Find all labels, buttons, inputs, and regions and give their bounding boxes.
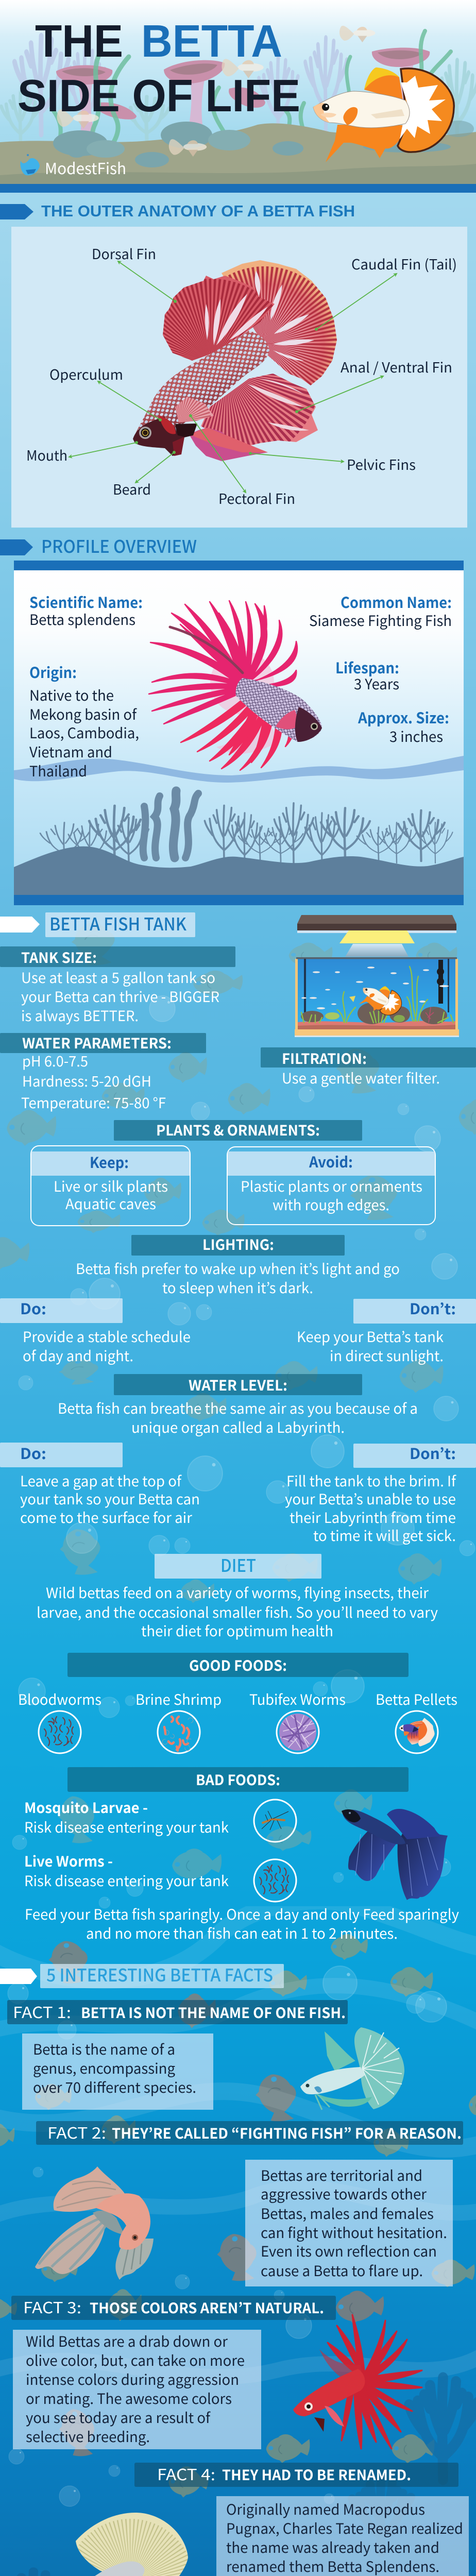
label: beard: Beard (113, 479, 151, 499)
block: water parameters: WATER PARAMETERS: (22, 1032, 172, 1053)
fact 2 text: Bettas, males and females (261, 2203, 434, 2224)
block: filtration: Use a gentle water filter. (282, 1067, 440, 1088)
text: origin (29, 661, 139, 781)
text: diet intro: Wild bettas feed on a variety of worms, flying insects, their (46, 1582, 429, 1603)
fact 2 heading: FACT 2: (47, 2121, 106, 2143)
fact 2 text: aggressive towards other (261, 2183, 427, 2204)
panel: profile overview (14, 561, 464, 905)
label: anal and ventral fin (295, 357, 452, 413)
text: origin: Mekong basin of (29, 704, 137, 724)
callout: water level do (0, 1442, 200, 1528)
label: operculum (49, 364, 162, 421)
text: common name (309, 591, 452, 631)
callout: lighting do: of day and night. (23, 1345, 133, 1366)
fact 1 text: genus, encompassing (33, 2058, 175, 2078)
block: filtration: FILTRATION: (282, 1048, 367, 1069)
text: origin: Thailand (29, 760, 87, 781)
fact 4 heading: THEY HAD TO BE RENAMED. (222, 2464, 411, 2485)
fact 4 text: the name was already taken and (226, 2537, 439, 2557)
fact 4 text: Originally named Macropodus (226, 2499, 425, 2519)
fact 1 text: over 70 different species. (33, 2077, 196, 2097)
heading: the outer anatomy of a betta fish: THE OUTER ANATOMY OF A BETTA FISH (41, 202, 355, 220)
heading: plants and ornaments (114, 1120, 362, 1141)
label: pectoral fin: Pectoral Fin (218, 488, 295, 508)
food: betta pellets: Betta Pellets (376, 1689, 457, 1709)
block: water parameters: Temperature: 75-80 °F (21, 1092, 166, 1113)
title: SIDE OF LIFE (18, 70, 300, 121)
fact 4 text (216, 2496, 469, 2576)
callout: lighting do: Provide a stable schedule (23, 1326, 191, 1347)
card: avoid: Plastic plants or ornaments (241, 1176, 422, 1196)
block: water level: Betta fish can breathe the same air as you because of a (58, 1398, 418, 1418)
text: diet intro (37, 1582, 438, 1641)
text: origin: Origin: (29, 661, 77, 683)
fact 1 text (22, 2033, 213, 2110)
bad food: live worms (24, 1851, 296, 1902)
block: tank size: Use at least a 5 gallon tank so (21, 967, 215, 988)
panel: outer anatomy diagram (11, 227, 467, 528)
lower-page waves, silhouettes and seabed (0, 1900, 476, 2576)
callout: water level do: come to the surface for air (20, 1507, 192, 1528)
fact 3 text: you see today are a result of (26, 2407, 211, 2428)
text: feeding advice: and no more than fish can eat in 1 to 2 minutes. (86, 1923, 398, 1943)
callout: lighting don't: Keep your Betta’s tank (297, 1326, 444, 1347)
illustration: blue betta (342, 1809, 448, 1900)
heading: good foods: GOOD FOODS: (189, 1655, 287, 1675)
callout: water level don't: their Labyrinth from time (290, 1507, 456, 1528)
callout: water level don't: Fill the tank to the brim. If (286, 1470, 456, 1491)
callout: water level do: Leave a gap at the top of (20, 1470, 182, 1491)
heading: bad foods (67, 1767, 409, 1792)
seabed silhouette (14, 791, 464, 895)
title (18, 15, 300, 121)
dorsal fin (163, 276, 275, 361)
card: keep: Live or silk plants (54, 1176, 168, 1196)
text: approximate size: Approx. Size: (358, 706, 449, 728)
fact 2 text: can fight without hesitation. (261, 2222, 447, 2243)
fact 1 heading: FACT 1: (13, 2000, 71, 2023)
heading: diet (155, 1552, 321, 1579)
card: keep: Aquatic caves (65, 1193, 156, 1214)
heading: plants and ornaments: PLANTS & ORNAMENTS: (156, 1120, 320, 1140)
title: BETTA (141, 15, 282, 66)
food: bloodworms: Bloodworms (18, 1689, 101, 1709)
illustration: salmon betta (35, 2166, 154, 2280)
callout: lighting do: Do: (20, 1297, 46, 1319)
fact 3 text: intense colors during aggression (26, 2369, 239, 2389)
illustration: cream betta (76, 2513, 188, 2576)
fact 3 heading (11, 2295, 336, 2320)
callout: water level don't: to time it will get sick. (313, 1525, 456, 1546)
callout: lighting do (0, 1297, 191, 1366)
label: dorsal fin: Dorsal Fin (92, 243, 156, 263)
card: keep: Keep: (90, 1151, 129, 1173)
caudal fin (219, 258, 340, 389)
label: mouth: Mouth (26, 445, 67, 465)
rocks (53, 121, 474, 167)
text: feeding advice (25, 1904, 459, 1943)
text: origin: Vietnam and (29, 741, 112, 762)
fact 2 text: Bettas are territorial and (261, 2165, 422, 2185)
text: lifespan (335, 656, 399, 694)
illustration: red betta fish (129, 258, 340, 461)
food: brine shrimp (135, 1689, 222, 1753)
block: water level (58, 1374, 418, 1437)
heading: profile overview: PROFILE OVERVIEW (41, 533, 197, 558)
callout: lighting don't: Don’t: (410, 1297, 456, 1319)
fact 3 text (13, 2330, 261, 2449)
fact 3 text: selective breeding. (26, 2426, 150, 2447)
callout: lighting don't (297, 1297, 476, 1366)
label: pectoral fin (189, 414, 295, 508)
fact 4 text: Pugnax, Charles Tate Regan realized (226, 2518, 463, 2538)
fact 1 text: Betta is the name of a (33, 2039, 175, 2059)
label: dorsal fin (92, 243, 177, 303)
body with scale spots (133, 331, 269, 439)
bad food: live worms: Risk disease entering your tank (24, 1870, 229, 1891)
illustration: teal betta (300, 2027, 404, 2110)
fact 3 heading: FACT 3: (23, 2295, 81, 2318)
head (133, 415, 197, 456)
text: lifespan: 3 Years (354, 673, 399, 694)
text: origin: Laos, Cambodia, (29, 722, 139, 743)
illustration: red crowntail betta (293, 2315, 422, 2449)
text: feeding advice: Feed your Betta fish sparingly. Once a day and only Feed sparingly (25, 1904, 459, 1924)
block: lighting: LIGHTING: (202, 1234, 274, 1255)
heading: betta fish tank: BETTA FISH TANK (49, 910, 186, 936)
label: beard (113, 451, 176, 499)
food: tubifex worms: Tubifex Worms (249, 1689, 346, 1709)
callout: lighting don't: in direct sunlight. (330, 1345, 444, 1366)
logo: ModestFish: ModestFish (45, 156, 126, 179)
text: origin: Native to the (29, 685, 114, 705)
pink mushroom corals (56, 47, 430, 134)
background fish and bubbles through the care and facts sections (0, 919, 476, 2506)
small pale fish (57, 26, 376, 157)
food: brine shrimp: Brine Shrimp (135, 1689, 222, 1709)
text: common name: Siamese Fighting Fish (309, 610, 452, 631)
block: water parameters: Hardness: 5-20 dGH (22, 1071, 151, 1091)
food: tubifex worms (249, 1689, 346, 1753)
label: caudal fin: Caudal Fin (Tail) (351, 253, 457, 274)
fact 3 text: olive color, but, can take on more (26, 2350, 245, 2370)
block: lighting: to sleep when it’s dark. (162, 1277, 313, 1298)
heading: diet: DIET (220, 1552, 256, 1577)
fact 4 heading (134, 2462, 458, 2487)
block: lighting: Betta fish prefer to wake up when it’s light and go (76, 1258, 400, 1279)
block: water parameters (0, 1032, 206, 1113)
fact 2 text (245, 2160, 453, 2286)
label: operculum: Operculum (49, 364, 123, 384)
pelvic fins (189, 428, 268, 461)
pectoral fin (175, 397, 214, 422)
header illustration: underwater scene with betta fish (0, 0, 476, 184)
text: approximate size: 3 inches (389, 726, 443, 747)
card: avoid: Avoid: (309, 1150, 353, 1172)
heading: 5 interesting betta facts: 5 INTERESTING BETTA FACTS (46, 1961, 273, 1987)
label: pelvic fins: Pelvic Fins (347, 454, 416, 474)
fact 4 heading: FACT 4: (157, 2462, 215, 2485)
block: water level: unique organ called a Labyrinth. (131, 1417, 345, 1437)
fact 1 heading (7, 2000, 348, 2024)
fact 2 text: Even its own reflection can (261, 2241, 437, 2261)
callout: water level do: Do: (20, 1442, 46, 1464)
title: THE (35, 15, 123, 66)
callout: water level do: your tank so your Betta can (20, 1488, 200, 1509)
heading: good foods (67, 1653, 409, 1677)
heading: bad foods: BAD FOODS: (196, 1769, 280, 1790)
text: approximate size (358, 706, 449, 747)
text: scientific name: Betta splendens (29, 609, 135, 630)
bad food: live worms: Live Worms - (24, 1851, 113, 1871)
fact 1 heading: BETTA IS NOT THE NAME OF ONE FISH. (81, 2002, 346, 2023)
text: diet intro: larvae, and the occasional smaller fish. So you’ll need to vary (37, 1602, 438, 1622)
card: keep (31, 1146, 190, 1226)
text: scientific name: Scientific Name: (29, 591, 143, 613)
text: common name: Common Name: (341, 591, 452, 613)
callout: water level don't (285, 1442, 476, 1546)
bad food: mosquito larvae: Risk disease entering your tank (24, 1817, 229, 1837)
food: bloodworms (18, 1689, 101, 1753)
callout: water level don't: your Betta’s unable to use (285, 1488, 456, 1509)
fact 3 text: or mating. The awesome colors (26, 2388, 232, 2409)
label: anal and ventral fin: Anal / Ventral Fin (341, 357, 452, 377)
illustration: aquarium with light hood (295, 915, 459, 1037)
text: scientific name (29, 591, 143, 630)
text: lifespan: Lifespan: (335, 656, 399, 678)
sandy ground (0, 123, 476, 184)
bad food: mosquito larvae (24, 1797, 296, 1842)
block: water parameters: pH 6.0-7.5 (22, 1050, 88, 1071)
fact 2 heading (36, 2121, 463, 2145)
icon: orange and white betta (313, 67, 454, 162)
illustration: pink crowntail betta (149, 601, 322, 770)
label: caudal fin (315, 253, 457, 331)
fact 3 heading: THOSE COLORS AREN’T NATURAL. (90, 2297, 324, 2318)
block: tank size: is always BETTER. (21, 1005, 139, 1026)
bad food: mosquito larvae: Mosquito Larvae - (24, 1797, 148, 1818)
block: lighting (76, 1234, 400, 1298)
card: avoid: with rough edges. (273, 1194, 389, 1215)
seaweed (52, 31, 451, 147)
label: pelvic fins (249, 452, 416, 474)
fact 2 text: cause a Betta to flare up. (261, 2260, 423, 2281)
block: tank size: TANK SIZE: (21, 947, 97, 968)
anal fin (201, 374, 318, 445)
block: tank size: your Betta can thrive - BIGGER (21, 986, 219, 1007)
food: betta pellets (376, 1689, 457, 1753)
fact 4 text: renamed them Betta Splendens. (226, 2556, 439, 2576)
block: water level: WATER LEVEL: (189, 1375, 287, 1395)
text: diet intro: their diet for optimum health (141, 1620, 333, 1641)
decorative corals behind the title (1, 36, 476, 146)
water wave (14, 756, 464, 783)
card: avoid (227, 1147, 435, 1225)
fact 2 heading: THEY’RE CALLED “FIGHTING FISH” FOR A REASON. (112, 2123, 462, 2143)
callout: water level don't: Don’t: (410, 1442, 456, 1464)
fact 3 text: Wild Bettas are a drab down or (26, 2331, 228, 2351)
block: filtration (261, 1047, 476, 1088)
block: tank size (0, 946, 235, 1026)
label: mouth (26, 441, 138, 465)
